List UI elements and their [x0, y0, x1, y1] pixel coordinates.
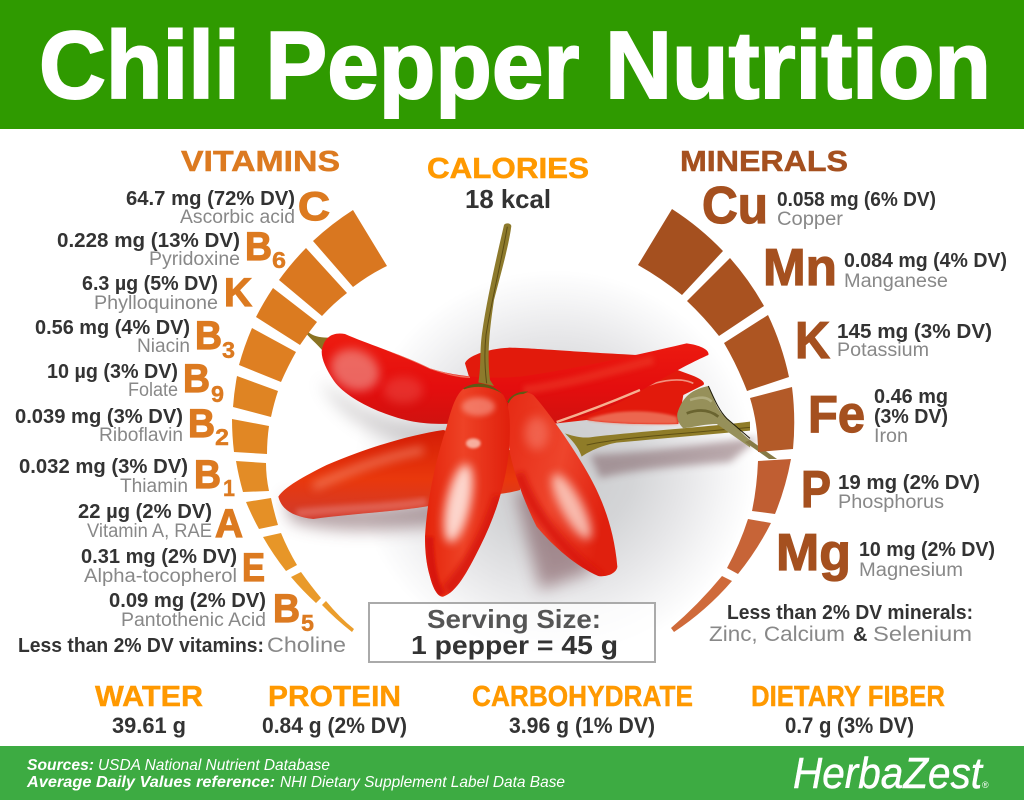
sources	[26, 757, 565, 791]
vitamin B2: 0.039 mg (3% DV)	[15, 406, 183, 428]
vitamin B5: 0.09 mg (2% DV)	[109, 590, 266, 612]
segment Mn	[687, 258, 764, 336]
macro: dietary fiber	[751, 681, 945, 738]
less than 2% minerals: Zinc, Calcium	[709, 623, 845, 646]
manganese: Mn	[763, 239, 837, 297]
heading: calories	[427, 153, 589, 214]
stem continuation past arc	[745, 440, 777, 459]
macro: carbohydrate: 3.96 g (1% DV)	[509, 713, 655, 738]
centre front pepper	[425, 386, 510, 597]
segment Cu	[638, 209, 723, 295]
segment B3	[239, 328, 296, 382]
back pepper	[465, 348, 704, 424]
segment B9	[233, 376, 278, 417]
vitamin B3: 3	[222, 337, 235, 363]
manganese: Manganese	[844, 271, 948, 292]
potassium: Potassium	[837, 340, 929, 361]
title banner	[0, 0, 1024, 129]
vitamin C	[126, 185, 330, 229]
manganese	[763, 239, 1007, 297]
vitamin B2: 2	[215, 424, 229, 450]
vitamin E: E	[242, 546, 265, 590]
vitamin K: 6.3 µg (5% DV)	[82, 273, 218, 295]
phosphorus: 19 mg (2% DV)	[838, 472, 980, 494]
mineral arc	[638, 209, 794, 632]
sources: NHI Dietary Supplement Label Data Base	[280, 774, 565, 791]
vitamin B3: Niacin	[137, 336, 190, 357]
segment B6	[279, 248, 347, 316]
pepper caps	[463, 384, 505, 397]
magnesium: Mg	[776, 524, 851, 582]
vitamin B1	[19, 453, 235, 501]
vitamin E: 0.31 mg (2% DV)	[81, 546, 237, 568]
vitamin B6: 6	[272, 247, 286, 273]
macro: dietary fiber: DIETARY FIBER	[751, 681, 945, 713]
phosphorus	[801, 461, 980, 519]
vitamin B3: B	[195, 314, 222, 358]
vitamin B1: 1	[223, 475, 235, 501]
less than 2% vitamins: Less than 2% DV vitamins:	[18, 635, 264, 657]
vitamin E	[81, 546, 265, 590]
title: Chili Pepper Nutrition	[39, 12, 991, 119]
upper long pepper	[322, 333, 709, 424]
manganese: 0.084 mg (4% DV)	[844, 250, 1007, 272]
vitamin C: C	[298, 185, 330, 229]
vitamin B9: 9	[211, 381, 224, 407]
vitamin B6	[57, 225, 286, 273]
heading: vitamins: VITAMINS	[181, 146, 340, 178]
segment B1	[236, 461, 269, 492]
lower left pepper	[278, 430, 520, 519]
segment tail	[671, 576, 732, 632]
segment Fe	[750, 387, 794, 452]
vitamin B9: B	[183, 357, 210, 401]
potassium: 145 mg (3% DV)	[837, 321, 992, 343]
footer bar	[0, 746, 1024, 800]
vitamin B3	[35, 314, 235, 363]
vitamin A: A	[215, 502, 243, 546]
macro: carbohydrate: CARBOHYDRATE	[472, 681, 693, 713]
vitamin B2: B	[188, 402, 215, 446]
macro: water: 39.61 g	[112, 713, 186, 738]
vitamin B6: 0.228 mg (13% DV)	[57, 230, 240, 252]
vitamin B5	[109, 587, 314, 636]
vitamin B5: 5	[301, 610, 314, 636]
iron: (3% DV)	[874, 406, 948, 428]
right front pepper	[508, 393, 617, 576]
iron: Iron	[874, 426, 908, 447]
less than 2% vitamins: Choline	[267, 634, 346, 657]
macro: dietary fiber: 0.7 g (3% DV)	[785, 713, 914, 738]
macro: protein: PROTEIN	[268, 681, 401, 713]
copper: Cu	[702, 177, 768, 235]
potassium	[795, 312, 992, 370]
magnesium: 10 mg (2% DV)	[859, 539, 995, 561]
vitamin B5: Pantothenic Acid	[121, 610, 266, 631]
iron: 0.46 mg	[874, 386, 948, 408]
segment B5	[291, 572, 321, 603]
less than 2% minerals: Selenium	[873, 623, 972, 646]
macro: protein	[262, 681, 407, 738]
vitamin B2	[15, 402, 229, 450]
vitamin B1: Thiamin	[120, 476, 188, 497]
segment K	[724, 315, 789, 391]
less than 2% minerals	[709, 602, 973, 646]
logo: HerbaZest: ®	[982, 780, 989, 790]
vitamin labels	[15, 185, 346, 657]
phosphorus: Phosphorus	[838, 492, 944, 513]
magnesium: Magnesium	[859, 560, 963, 581]
cast shadows	[285, 380, 760, 590]
calories value: 18 kcal	[465, 184, 551, 214]
illustration: chili peppers on a shaded plate	[277, 223, 777, 604]
vitamin arc	[232, 210, 387, 632]
segment A	[246, 498, 278, 529]
vitamin C: Ascorbic acid	[180, 207, 295, 228]
vitamin A	[78, 501, 243, 546]
vitamin E: Alpha-tocopherol	[84, 566, 237, 587]
sources: USDA National Nutrient Database	[98, 757, 330, 774]
copper: 0.058 mg (6% DV)	[777, 189, 936, 211]
upper long pepper stem	[306, 332, 332, 352]
segment K	[256, 288, 317, 345]
serving size box	[369, 603, 655, 662]
vitamin B9: Folate	[128, 380, 178, 401]
serving size box: Serving Size:	[427, 604, 601, 634]
vitamin B9: 10 µg (3% DV)	[47, 361, 178, 383]
vitamin B3: 0.56 mg (4% DV)	[35, 317, 190, 339]
vitamin B6: Pyridoxine	[149, 249, 240, 270]
sources: Sources:	[27, 757, 94, 774]
segment E	[263, 533, 297, 571]
segment P	[752, 459, 791, 514]
vitamin A: 22 µg (2% DV)	[78, 501, 212, 523]
heading: calories: CALORIES	[427, 153, 589, 185]
macro: carbohydrate	[472, 681, 693, 738]
magnesium	[776, 524, 995, 582]
vitamin B1: 0.032 mg (3% DV)	[19, 456, 188, 478]
macro: protein: 0.84 g (2% DV)	[262, 713, 407, 738]
segment C	[313, 210, 387, 287]
dried calyx	[677, 386, 750, 447]
vitamin B2: Riboflavin	[99, 425, 183, 446]
segment tail	[322, 601, 354, 632]
macro: water	[95, 681, 203, 738]
vitamin K: Phylloquinone	[94, 293, 218, 314]
vitamin A: Vitamin A, RAE	[87, 521, 212, 542]
vitamin C: 64.7 mg (72% DV)	[126, 188, 295, 210]
green stem, right	[565, 422, 750, 457]
sources: Average Daily Values reference:	[26, 774, 275, 791]
iron: Fe	[808, 386, 865, 444]
vitamin B9	[47, 357, 224, 407]
segment B2	[232, 419, 269, 454]
macro: water: WATER	[95, 681, 203, 713]
logo: HerbaZest: HerbaZest	[793, 749, 984, 798]
iron	[808, 386, 948, 447]
vitamin B6: B	[245, 225, 272, 269]
segment Mg	[727, 519, 771, 574]
serving size box: 1 pepper = 45 g	[411, 630, 618, 660]
heading: minerals: MINERALS	[680, 146, 848, 178]
phosphorus: P	[801, 461, 831, 519]
copper: Copper	[777, 209, 844, 230]
less than 2% minerals: &	[853, 624, 867, 646]
copper	[702, 177, 936, 235]
vitamin K: K	[224, 271, 252, 315]
vitamin B5: B	[273, 587, 300, 631]
potassium: K	[795, 312, 830, 370]
vitamin K	[82, 271, 252, 315]
vitamin B1: B	[194, 453, 221, 497]
mineral labels	[702, 177, 1007, 646]
less than 2% minerals: Less than 2% DV minerals:	[727, 602, 973, 624]
tall stem	[478, 223, 511, 386]
